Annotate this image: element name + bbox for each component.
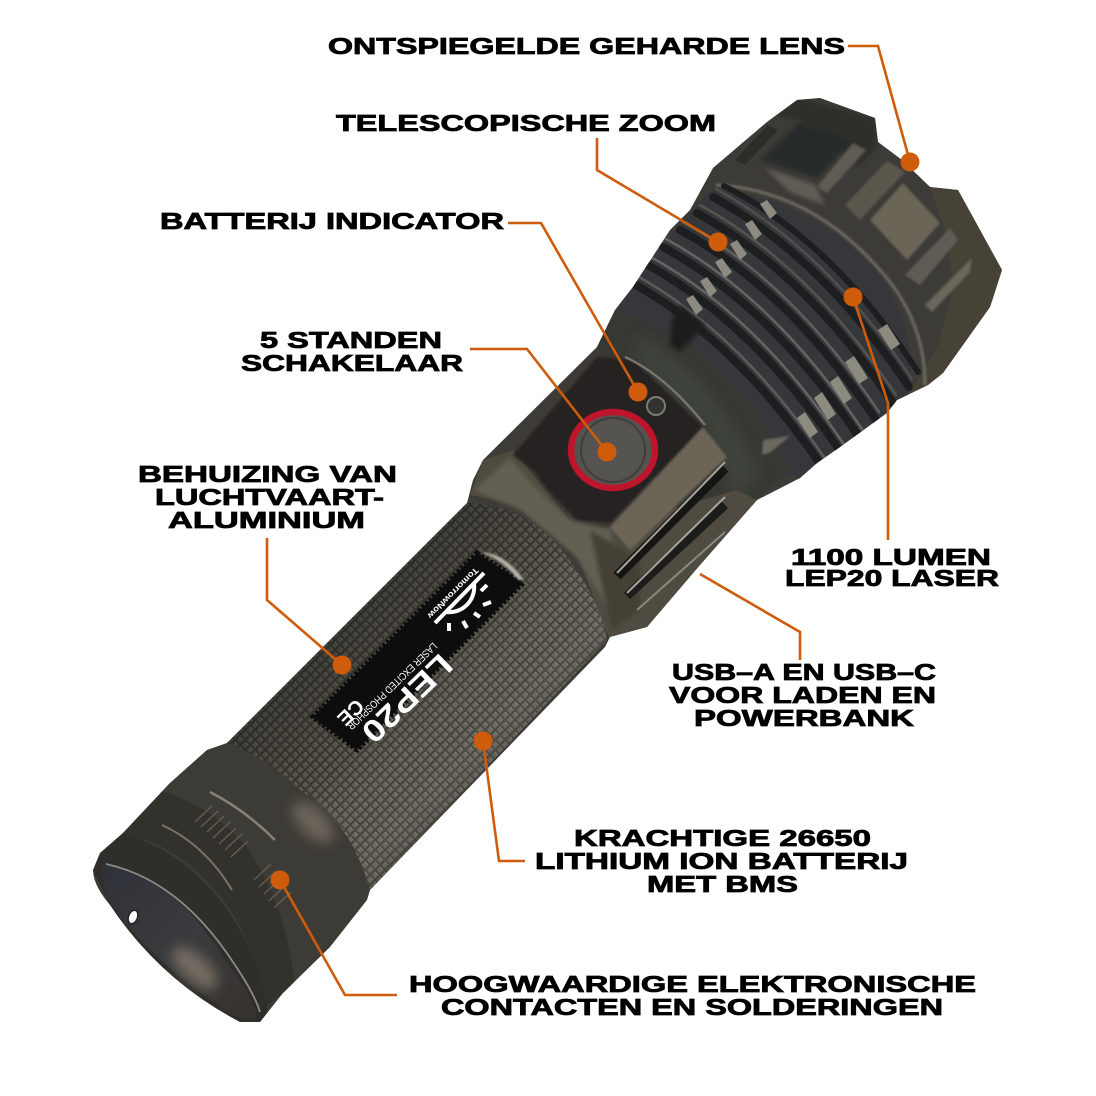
heading: behuizing: BEHUIZING VAN (138, 461, 397, 487)
tail collar (160, 743, 370, 956)
heading: telescopische zoom: TELESCOPISCHE ZOOM (336, 110, 716, 136)
heading: batterij: LITHIUM ION BATTERIJ (535, 848, 908, 874)
end cap rim (93, 833, 268, 1022)
red ring (571, 412, 655, 488)
heading: contacten: CONTACTEN EN SOLDERINGEN (441, 994, 943, 1020)
plate highlight edge (625, 357, 705, 425)
heading: contacten (409, 971, 976, 1020)
product name: LEP20 (355, 647, 459, 750)
head: lens bezel (908, 185, 1002, 395)
callout: usb (700, 574, 800, 660)
callout: behuizing (267, 538, 352, 674)
head: cooling fins (600, 186, 918, 480)
heading: batterij (535, 825, 908, 897)
heading: batterij indicator: BATTERIJ INDICATOR (160, 208, 505, 234)
callout: telescopische zoom (597, 138, 728, 252)
heading: lumen (785, 544, 1000, 591)
lit notch (480, 552, 524, 580)
callout: ontspiegelde geharde lens (848, 46, 920, 172)
button cap (581, 418, 645, 482)
CE mark: CE (333, 694, 368, 730)
subtitle: LASER EXCITED PHOSPHOR (344, 640, 439, 732)
flashlight (93, 98, 1010, 1022)
heading: schakelaar: SCHAKELAAR (241, 350, 464, 376)
lit side panel (610, 427, 727, 550)
callout: 1100 lumen (844, 288, 888, 540)
icon: lamp logo (435, 573, 491, 631)
callout: contacten (270, 870, 397, 995)
heading: lumen: 1100 LUMEN (791, 544, 991, 570)
collar (470, 450, 757, 637)
icon: battery indicator led (647, 397, 665, 415)
heading: schakelaar: 5 STANDEN (260, 327, 442, 353)
end face (102, 863, 241, 1006)
heading: batterij: KRACHTIGE 26650 (574, 825, 871, 851)
heading: usb: VOOR LADEN EN (669, 682, 936, 708)
tail section (93, 743, 370, 1022)
heading: behuizing: ALUMINIUM (168, 507, 365, 533)
body silhouette (93, 98, 1002, 1022)
neck (597, 305, 790, 565)
heading: ontspiegelde geharde lens: ONTSPIEGELDE GEHARDE LENS (328, 33, 845, 59)
head: crown ring (713, 98, 972, 400)
switch plate (513, 357, 703, 523)
knurled barrel (227, 503, 607, 890)
callout: schakelaar (470, 349, 616, 462)
heading: contacten: HOOGWAARDIGE ELEKTRONISCHE (409, 971, 976, 997)
heading: batterij: MET BMS (647, 871, 798, 897)
heading: usb: USB–A EN USB–C (672, 659, 936, 685)
heading: behuizing (138, 461, 397, 533)
power button (571, 412, 655, 488)
brand: TomorrowNow (425, 566, 481, 621)
heading: usb (669, 659, 936, 731)
heading: schakelaar (241, 327, 464, 376)
heading: lumen: LEP20 LASER (785, 565, 1000, 591)
callout: batterij (474, 732, 525, 861)
heading: usb: POWERBANK (694, 705, 915, 731)
heading: behuizing: LUCHTVAART- (155, 484, 384, 510)
rim highlight (106, 864, 260, 1012)
grip ring (120, 788, 295, 1010)
callout: batterij indicator (508, 223, 648, 402)
head and neck (470, 98, 1010, 637)
hole (128, 910, 138, 924)
grooves (617, 462, 725, 610)
label plate (313, 552, 524, 750)
face highlight (168, 942, 222, 994)
